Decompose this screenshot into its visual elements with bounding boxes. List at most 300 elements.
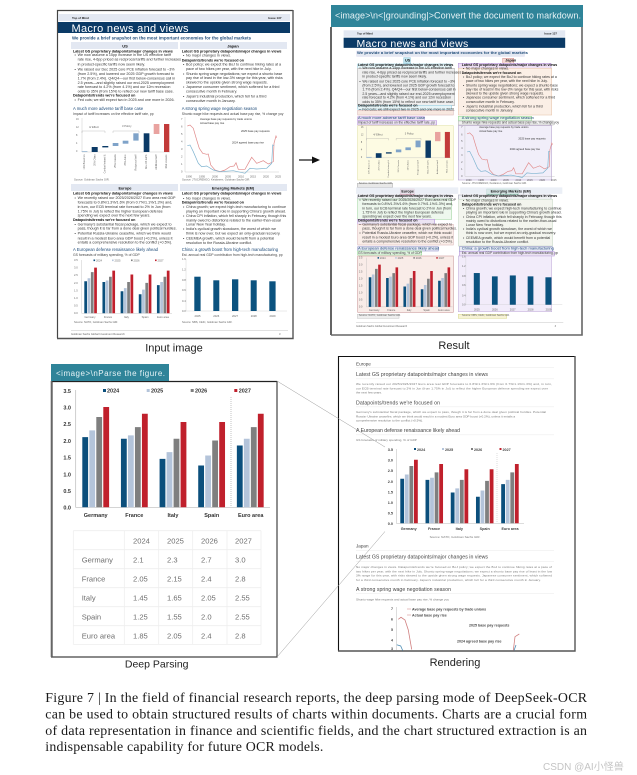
chart: European defense: 2025 [398,257,404,260]
chart: European defense: Source: NATO, Goldman Sachs GIR. [359,314,401,317]
chart: tariff base case: 16 [76,118,79,121]
rendered chart: grouped bars: 1.0 [388,501,393,505]
chart: European defense: Spain [142,315,149,319]
chart: tariff base case: A much more adverse tariff base case [358,115,426,120]
column: US: in product-specific tariffs now seem likely. [362,75,427,79]
column: Emerging Markets: China growth; we expect high-tech manufacturing to continue [466,207,562,211]
column: Emerging Markets [460,187,562,244]
column: US [71,42,181,102]
chart: European defense: Germany [369,309,380,312]
chart: European defense: 0.5 [359,299,363,302]
column: US: • [74,67,76,71]
chart: tariff base case: New US tariffs [145,154,148,169]
rendered chart: wage lines: 6 [391,617,393,621]
rendered chart: grouped bars: 2024 [417,448,426,452]
column: Europe: Potential Russia-Ukraine ceasefire, which we think would [362,231,452,235]
column: Europe: spending we expect over the next few years. [78,214,150,218]
column: US: rate forecast to 4.2% (from 4.1%) and our 12m recession [362,96,451,100]
chart: European defense: 1.0 [74,296,78,300]
column: Japan: No major changes in views. [466,67,509,71]
column: Emerging Markets: • [463,207,465,211]
column: US: We raised our Dec 2025 core PCE inflation forecast to ~3% [362,79,455,83]
column: US: rate forecast to 4.2% (from 4.1%) and our 12m recession [78,85,170,89]
chart: China growth: 1.2 [462,265,466,268]
chart: European defense: 1.5 [74,288,78,292]
chart: spring wage negotiation: 2025 base pay requests [241,129,270,133]
column: US: 2.5 years—and slightly raised our end-2025 unemployment [362,92,455,96]
chart: spring wage negotiation [461,115,559,185]
chart: tariff base case: Risk scenario [165,154,168,168]
rendered chart: grouped bars: Source: NATO, Goldman Sachs GIR. [430,535,481,539]
data table: 2.3 [167,556,178,565]
chart: China growth: 0.0 [182,309,186,313]
chart: tariff base case: New US tariffs [427,160,430,174]
chart: China growth: 0.6 [182,288,186,292]
chart: European defense: Italy [407,309,412,312]
rendered chart: grouped bars: 1.5 [388,490,393,494]
column: Europe: Datapoints/trends we're focused on [358,219,418,223]
rendered chart: grouped bars: 2.0 [388,480,393,484]
rendered chart: grouped bars: Italy [456,527,464,531]
chart: China growth: 2026 [492,308,498,311]
column: Europe: Europe [401,189,414,193]
column: Emerging Markets: playing an important role in supporting China's growth ahead. [466,211,562,215]
chart: spring wage negotiation: 2025 [275,174,281,178]
chart: European defense: 2.5 [359,271,363,274]
column: Emerging Markets: Latest GS proprietary datapoints/major changes in views [182,192,281,196]
column: Japan: • [183,72,185,76]
data table: 2.7 [201,556,212,565]
column: US: Latest GS proprietary datapoints/major changes in views [73,50,173,54]
panel: deep parsing [51,364,277,657]
column: Emerging Markets: resolution to the Russia-Ukraine conflict. [186,241,252,245]
rendered chart: wage lines: 2025 base pay requests [469,624,509,628]
rendered section: Europe: A European defense renaissance likely ahead [356,428,460,434]
chart: spring wage negotiation: 3 [181,147,183,151]
column: Europe: Germany's substantial fiscal package, which we expect to [78,222,172,226]
rendered section: Europe: Latest GS proprietary datapoints/major changes in views [356,372,488,378]
column: Japan: Datapoints/trends we're focused on [462,71,521,75]
column: Japan: consecutive month in January. [466,109,513,113]
caption: deep parsing: Deep Parsing [125,659,189,671]
chart: spring wage negotiation: 2020 [263,174,269,178]
data table: 2024 [133,537,150,546]
column: Japan: consecutive month in February. [466,100,515,104]
column: US: • [359,79,361,83]
chart: spring wage negotiation: 1 [181,162,183,166]
chart: spring wage negotiation: 2015 [250,174,256,178]
column: Emerging Markets: Lunar New Year holiday. [466,223,504,227]
chart: China growth: 1.2 [182,267,186,271]
prompt bar: grounding [331,5,583,27]
column: US: 2.5 years—and slightly raised our end-2025 unemployment [78,81,174,85]
column: Japan: • [183,63,185,67]
chart: China growth: Est. annual real GDP contribution from high-tech manufacturing, pp [462,251,558,255]
rendered section: Europe [356,361,554,442]
chart: European defense: Germany [84,315,96,319]
chart: tariff base case: 25% Autos [407,160,410,170]
chart: European defense: 2027 [439,257,445,260]
data table: 2.05 [201,594,216,603]
column: Japan: skewed to the upside given strong wage requests. [186,80,268,84]
masthead [344,30,565,55]
column: Emerging Markets: • [183,227,185,231]
chart: China growth: 1.6 [462,256,466,259]
chart: tariff base case: 0 [361,157,363,159]
column: Emerging Markets: playing an important role in supporting China's growth ahead. [186,209,286,213]
column: US: (from 2.5%), and lowered our 2025 GDP growth forecast to [78,72,174,76]
chart: tariff base case: 25% Canada [115,154,117,168]
chart: China growth: 0.8 [182,278,186,282]
chart: spring wage negotiation: 7 [181,117,183,121]
column: Emerging Markets: Lunar New Year holiday. [186,223,226,227]
data table [73,531,261,644]
chart: China growth: 2026 [213,314,220,318]
chart: tariff base case: A much more adverse tariff base case [73,106,144,111]
chart: spring wage negotiation: 0 [181,170,183,174]
column: Europe: entails a comprehensive resolution to the conflict (+0.5%). [78,241,172,245]
chart: China growth: 0.4 [182,299,186,303]
callout lines: deep parsing to rendering [277,381,385,657]
column: US: We now assume a 15pp increase in the US effective tariff [78,53,172,57]
chart: European defense: GS forecasts of military spending, % of GDP [358,251,422,255]
column: Japan: Latest GS proprietary datapoints/major changes in views [462,63,557,67]
chart: spring wage negotiation: 2020 [539,179,546,182]
column: Europe: • [359,223,361,227]
chart: spring wage negotiation: 0 [461,175,463,178]
chart: European defense: France [104,315,113,319]
chart: European defense: 2025 [114,258,121,262]
chart: spring wage negotiation: 5 [181,132,183,136]
chart: tariff base case: Reciprocal tariff [134,154,138,170]
figure caption: can be used to obtain structured results of charts within documents. Charts are a crucial form [45,708,587,722]
chart: tariff base case: Source: Goldman Sachs GIR. [359,182,393,185]
chart: grouped bars: 1.5 [63,456,71,462]
column: US: Datapoints/trends we're focused on [73,94,136,98]
column: Emerging Markets: India's cyclical growth slowdown, the worst of which we [466,227,552,231]
chart: spring wage negotiation: 6 [461,133,463,136]
data table: Spain [82,613,101,622]
chart: China growth: 2027 [232,314,238,318]
chart: European defense: Spain [423,309,431,312]
column: US: • [74,98,76,102]
data table: 3.0 [235,556,246,565]
page footer: 3 [555,325,557,328]
column: Europe: forecasts to 0.8%/1.3%/1.6% (from 0.7%/1.1%/1.3%) and, [362,202,453,206]
chart: spring wage negotiation: 2025 [551,179,557,182]
column: Emerging Markets: China CPI inflation, which fell sharply in February, though this [466,215,562,219]
column: Europe: pass, though it is far from a done deal given political hurdles. [362,227,457,231]
chart: spring wage negotiation: 2005 [225,174,231,178]
data table: 2.8 [235,575,246,584]
data table: 2.0 [201,613,212,622]
chart: tariff base case: 12 [361,135,364,137]
legend [103,388,251,394]
prompt bar: parse the figure: <image>\nParse the figure. [56,369,165,378]
data table: 1.55 [167,613,182,622]
chart: European defense: 3.5 [359,257,363,260]
rendered section: Japan: Shunto wage hike requests and actual base pay rise, % change yoy [356,598,449,602]
column: Emerging Markets: • [463,236,465,240]
chart: grouped bars: 2.0 [63,439,71,445]
column: US: We raised our Dec 2025 core PCE inflation forecast to ~3% [78,67,175,71]
data table: 1.25 [133,613,148,622]
chart: spring wage negotiation: 2025 base pay requests [518,137,546,140]
chart: spring wage negotiation: Average base pay requests by trade unions [200,117,252,121]
chart: spring wage negotiation: 5 [461,140,463,143]
chart: spring wage negotiation: A strong spring wage negotiation season [462,115,534,120]
chart: China growth: 2029 [270,314,276,318]
column: Europe: We recently raised our 2025/2026/2027 Euro area real GDP [362,198,457,202]
column: Europe: 1.75% in Jul) to reflect the higher European defense [78,209,163,213]
chart: China growth [462,245,562,317]
column: Japan: skewed to the upside given strong wage requests. [466,92,544,96]
rendered chart: grouped bars: Euro area [501,527,519,531]
data table: 2.4 [201,575,212,584]
chart: European defense: A European defense renaissance likely ahead [73,247,159,252]
column: Japan: pay rise of least in the low-3% range for this year, with risks [466,87,559,91]
chart: grouped bars: 1.0 [63,472,71,478]
page footer: 3 [279,332,281,336]
chart: China growth: 2029 [546,308,552,311]
masthead: Macro news and views [72,23,189,35]
column: US: US [122,44,128,48]
column: Emerging Markets: Emerging Markets (EM) [212,186,255,190]
column: Japan: Latest GS proprietary datapoints/major changes in views [182,50,281,54]
chart: spring wage negotiation: 1995 [478,179,485,182]
rendered section: Europe: Germany's substantial fiscal package, which we expect to pass, though it is far from a done deal given political hurdles. Potential [356,410,546,414]
rendered chart: grouped bars: 2026 [474,448,482,452]
column: Japan: BoJ policy; we expect the BoJ to continue hiking rates at a [186,63,282,67]
rendered section: Europe: Russia- Ukraine ceasefire, which we think would result in a modest Euro area GDP boost (+0.2%), unless it entails a [356,414,515,418]
column: Japan: • [183,85,185,89]
column: Japan: Japan's industrial production, which fell for a third [186,95,266,99]
chart: tariff base case: 12 [76,126,79,129]
column: US: rate rise, 4-6pp priced as reciprocal tariffs and further increases [362,71,462,74]
chart: tariff base case: 3 Policy [405,133,414,136]
chart: tariff base case [73,106,170,182]
rendered chart: grouped bars: France [428,527,440,531]
chart: spring wage negotiation: 1 [461,168,463,171]
page footer: Goldman Sachs Global Investment Research [71,332,125,336]
chart: spring wage negotiation: 2015 [527,179,533,182]
figure caption: indispensable capability for future OCR models. [45,740,323,755]
chart: China growth: 2028 [528,308,534,311]
chart: European defense: Euro area [438,309,450,312]
chart: China growth: 1.6 [182,257,186,261]
column: Europe: • [359,198,361,202]
chart: tariff base case: 10% Based on [368,159,370,174]
chart: European defense: 2.0 [74,281,78,285]
column: US: • [74,53,76,57]
column: Europe [71,184,178,245]
page footer: Goldman Sachs Global Investment Research [356,325,408,328]
chart: spring wage negotiation: A strong spring wage negotiation season [182,106,258,111]
column: Japan: pace of two hikes per year, with the next hike in July. [186,67,272,71]
figure caption: of data representation in finance and scientific fields, and the chart structured extraction is an [45,724,587,739]
rendered chart: wage lines: 3 [391,647,393,651]
rendered section: Japan: A strong spring wage negotiation season [356,587,451,593]
column: Emerging Markets: • [463,199,465,203]
chart: tariff base case: 3 Policy [122,124,132,128]
column: Emerging Markets: • [183,214,185,218]
data table: 1.85 [133,632,148,641]
rendered section: Europe: We recently raised our 2025/2026/2027 Euro area real GDP forecasts to 0.8%/1.3%/1.6% (from 0.7%/1.1%/1.3%) and, in turn, [356,382,552,386]
chart: tariff base case: 16 [361,127,364,129]
chart: tariff base case: Combat fentanyl & [104,154,106,173]
rendered chart: grouped bars [388,448,524,539]
chart: China growth: Source: NBS, CEIC, Goldman Sachs GIR. [182,320,233,324]
masthead: Top of Mind [72,16,89,20]
column: US: We now assume a 15pp increase in the US effective tariff [362,66,452,70]
data table: 2.55 [235,594,250,603]
column: Japan: BoJ policy; we expect the BoJ to continue hiking rates at a [466,75,557,79]
chart: China growth: China: a growth boost from high-tech manufacturing [462,245,554,250]
data table: 2.15 [167,575,182,584]
column: US: 1.7% (from 2.4%). Q4/Q4—our first below-consensus call in [362,88,456,92]
column: US: Latest GS proprietary datapoints/major changes in views [358,63,453,67]
column: Europe: result in a modest Euro area GDP boost (+0.2%), unless it [362,236,453,239]
chart: tariff base case: 0 [76,150,78,153]
chart: tariff base case: 4/ Effect [373,134,383,137]
chart: grouped bars: 2.5 [63,422,71,428]
caption: result: Result [438,340,470,352]
chart: European defense: 2026 [416,257,422,260]
data table: 2.05 [167,632,182,641]
column: Japan: • [463,105,465,109]
chart: tariff base case: 4 [76,142,78,145]
chart: spring wage negotiation: Actual base pay rise [200,121,225,125]
chart: European defense: 0.5 [74,304,78,308]
chart: grouped bars: 3.5 [63,389,71,395]
masthead [58,14,290,40]
data table: France [82,575,105,584]
chart: European defense [358,245,452,317]
column: Japan: pace of two hikes per year, with the next hike in July. [466,79,548,83]
rendered section: Japan: two hikes per year, with the next hike in July. Shunto spring wage negotiations; we expect a shunto base pay rise of least in the low [356,569,553,573]
chart: grouped bars: France [125,513,143,519]
column: Europe: • [74,232,76,236]
rendered section: Europe: GS forecasts of military spending, % of GDP [356,438,417,442]
column: US: • [359,108,361,112]
column: Japan [462,58,559,113]
column: Japan: • [183,95,185,99]
chart: tariff base case: Additional tariff [436,160,439,174]
rendered chart: grouped bars: 3.5 [388,448,393,452]
rendered section: Europe: comprehensive resolution to the conflict (+0.5%). [356,419,423,423]
chart: European defense: 2.0 [359,278,363,281]
column: US [358,58,462,112]
column: US: rate rise, 4-6pp priced as reciprocal tariffs and further increases [78,58,181,62]
data table: 2.8 [235,632,246,641]
chart: spring wage negotiation: 6 [181,125,183,129]
rendered chart: grouped bars: 2027 [502,448,511,452]
chart: tariff base case: 8 [361,142,363,144]
column: Europe: Potential Russia-Ukraine ceasefire, which we think would [78,232,171,236]
chart: tariff base case: Impact of tariff increases on the effective tariff rate, pp [73,112,154,116]
column: Europe: Latest GS proprietary datapoints/major changes in views [73,192,173,196]
column: Japan: Shunto spring wage negotiations; we expect a shunto base [466,84,558,88]
chart: China growth [182,247,287,324]
column: Japan: Shunto spring wage negotiations; we expect a shunto base [186,72,282,76]
column: Japan: Japanese consumer sentiment, which softened for a third [466,96,555,100]
chart: European defense: 2024 [380,257,386,260]
column: Europe: 1.75% in Jul) to reflect the higher European defense [362,211,444,215]
legend: 2027 [239,388,251,394]
chart: grouped bars: Germany [84,513,109,519]
data table: Germany [82,556,113,565]
column: Emerging Markets: think is now over, but we expect an only-gradual recovery. [186,232,280,236]
rendered section: Japan: 3% range for this year, with risks skewed to the upside given strong wage requests. Japanese consumer sentiment, which softened [356,574,552,578]
column: US: Fed cuts; we still expect two in 2025 and one more in 2026. [78,98,175,102]
column: Japan [180,42,287,103]
chart: European defense: Italy [124,315,130,319]
rendered section: Europe: Datapoints/trends we're focused on [356,400,440,406]
chart: European defense: A European defense renaissance likely ahead [358,245,439,250]
panel: rendering [338,356,575,651]
column: Japan: • [183,54,185,58]
chart: China growth: 0.4 [462,294,466,297]
chart: European defense: France [387,309,396,312]
column: Europe: Europe [118,186,132,190]
chart: tariff base case: 25% Autos [124,154,127,165]
chart: spring wage negotiation: Average base pay requests by trade unions [479,126,529,129]
rendered chart: wage lines: 2024 agreed base pay rise [457,639,502,643]
rendered chart: grouped bars: Spain [480,527,490,531]
data table: 2.55 [235,613,250,622]
column: Emerging Markets: • [183,237,185,241]
column: Europe: Latest GS proprietary datapoints/major changes in views [358,194,453,198]
column: Emerging Markets: • [183,205,185,209]
column: Japan: • [463,96,465,100]
chart: European defense: Source: NATO, Goldman Sachs GIR. [74,320,118,324]
column: Japan: consecutive month in January. [186,99,236,103]
column: Europe: Germany's substantial fiscal package, which we expect to [362,223,452,227]
legend: 2026 [195,388,207,394]
arrow: input to result [299,156,320,164]
caption: rendering: Rendering [430,657,480,669]
chart: spring wage negotiation: 2000 [491,179,497,182]
detection boxes [357,51,554,318]
chart: China growth: Source: NBS, CEIC, Goldman Sachs GIR. [462,314,510,317]
column: Europe: pass, though it is far from a done deal given political hurdles. [78,227,177,231]
chart: spring wage negotiation: Shunto wage hike requests and actual base pay rise, % change yoy [462,121,559,125]
chart: spring wage negotiation: Source: JTUC/RENGO, Keidanren, Goldman Sachs GIR. [462,182,527,185]
chart: tariff base case: Additional tariff [155,154,158,170]
chart: China growth: 2027 [510,308,516,311]
masthead: We provide a brief snapshot on the most important economies for the global markets [72,36,252,40]
chart: spring wage negotiation: 2024 agreed base pay rise [510,148,541,151]
chart: European defense: 2027 [158,258,164,262]
chart: China growth: 2028 [251,314,257,318]
column: Europe: Datapoints/trends we're focused on [73,218,136,222]
chart: European defense [73,247,172,324]
column: Europe: • [359,231,361,235]
masthead: Issue 137 [268,16,282,20]
column: Emerging Markets: China CPI inflation, which fell sharply in February, though this [186,214,286,218]
chart: grouped bars: 0.0 [63,506,71,512]
figure caption [45,691,588,755]
document page: macro news [58,14,290,336]
chart: spring wage negotiation: Actual base pay rise [479,130,503,133]
chart: European defense: 2.5 [74,273,78,277]
chart: tariff base case [358,115,451,185]
column: Europe: We recently raised our 2025/2026/2027 Euro area real GDP [78,196,176,200]
column: Emerging Markets: Latest GS proprietary datapoints/major changes in views [462,194,557,198]
column: US: Datapoints/trends we're focused on [358,104,418,108]
column: Japan: consecutive month in February. [186,90,237,94]
prompt bar: grounding: <image>\n<|grounding|>Convert the document to markdown. [335,11,581,21]
